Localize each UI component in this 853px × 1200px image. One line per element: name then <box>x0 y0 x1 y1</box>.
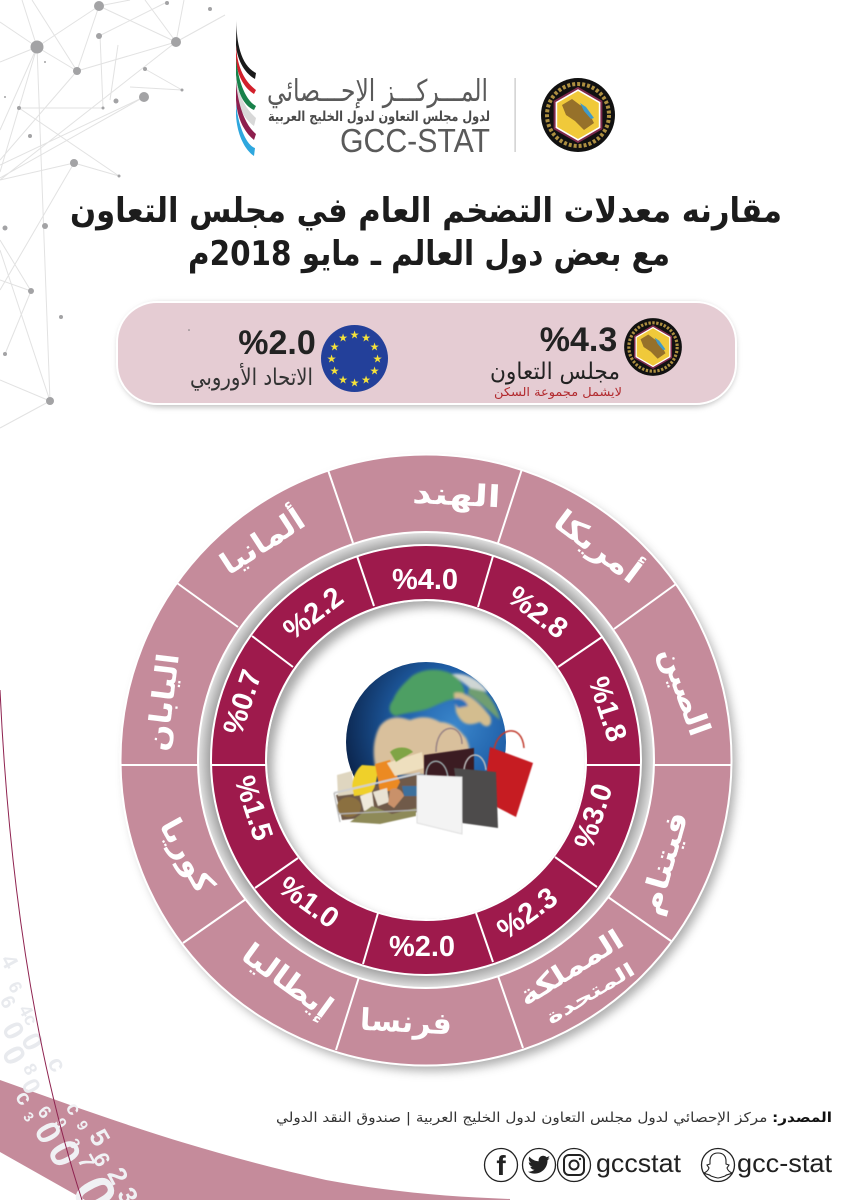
scattered number pattern: 0 <box>26 1116 69 1150</box>
scattered number pattern: 2 <box>101 1162 135 1189</box>
icon: EU flag: ★ <box>330 364 340 378</box>
basket with vegetables <box>334 748 424 824</box>
value: UK: %2.3 <box>491 881 564 946</box>
inner ring of values <box>238 572 614 948</box>
GCC note: لايشمل مجموعة السكن <box>494 385 622 400</box>
ring shadow <box>126 461 736 1071</box>
segment: Vietnam: فيتنام <box>633 808 696 919</box>
segment: Korea: كوريا <box>152 812 222 900</box>
ring gap <box>198 532 654 988</box>
scattered number pattern: 4c <box>15 1002 42 1029</box>
segment: India <box>392 476 501 596</box>
icon: EU flag: ★ <box>373 352 383 366</box>
value: France: %2.0 <box>389 931 455 963</box>
segment: Vietnam <box>569 780 696 919</box>
title line 2: مع بعض دول العالم ـ مايو 2018م <box>188 234 670 274</box>
EU value: %2.0 <box>238 324 316 362</box>
scattered number pattern: 0 <box>16 1074 46 1099</box>
EU label: الاتحاد الأوروبي <box>190 363 313 391</box>
scattered number pattern: c <box>10 1086 38 1110</box>
icon: facebook: f <box>496 1150 506 1181</box>
logo: GCC-STAT <box>236 18 490 159</box>
icon: GCC emblem <box>541 78 615 152</box>
value: Germany: %2.2 <box>278 581 350 646</box>
icon: snapchat <box>702 1148 734 1182</box>
value: Korea: %1.5 <box>228 772 278 845</box>
icon: EU flag: ★ <box>338 374 348 386</box>
grey bag <box>454 755 498 828</box>
value: China: %1.8 <box>582 673 632 746</box>
scattered number pattern: 0 <box>15 1027 50 1056</box>
segment: China: الصين <box>652 642 717 741</box>
scattered number pattern: 6 <box>88 1148 116 1171</box>
segment: Germany <box>212 499 350 646</box>
segment: Italy: إيطاليا <box>235 936 339 1026</box>
segment: USA <box>501 501 649 645</box>
segment: Korea <box>152 772 278 900</box>
thin maroon curve <box>0 690 82 1200</box>
bottom pink swoosh band <box>0 1080 510 1200</box>
icon: EU flag: ★ <box>330 340 340 354</box>
segment: Germany: ألمانيا <box>212 499 312 583</box>
icon: EU flag: ★ <box>350 328 360 342</box>
scattered number pattern: 3 <box>20 1109 38 1125</box>
globe <box>346 662 506 786</box>
segment: France: فرنسا <box>359 1003 453 1042</box>
scattered number pattern: 8 <box>19 1060 41 1078</box>
scattered number pattern: 5 <box>83 1124 116 1151</box>
outer ring of country segments <box>159 493 693 1027</box>
network background pattern <box>0 0 225 428</box>
center disc <box>264 598 593 927</box>
white bag <box>417 761 462 834</box>
maroon bag <box>424 728 474 790</box>
icon: EU flag: ★ <box>361 332 371 344</box>
segment: UK: المملكة <box>513 924 630 1013</box>
source label and text: المصدر: مركز الإحصائي لدول مجلس التعاون لدول الخليج العربية | صندوق النقد الدولي <box>276 1110 832 1126</box>
logo arabic subtitle: لدول مجلس التعاون لدول الخليج العربية <box>268 109 490 125</box>
icon: GCC emblem small <box>624 318 682 376</box>
title line 1: مقارنه معدلات التضخم العام في مجلس التعاون <box>70 191 782 231</box>
icon: EU flag: ★ <box>361 374 371 386</box>
segment: Japan: اليابان <box>140 651 187 753</box>
logo divider <box>514 78 516 152</box>
segment: Italy <box>235 870 345 1026</box>
scattered number pattern: 9 <box>50 1116 70 1132</box>
scattered number pattern: 3 <box>64 1136 83 1152</box>
social media row <box>484 1148 833 1182</box>
segment: France <box>359 931 455 1042</box>
scattered number pattern: 7 <box>73 1150 101 1173</box>
scattered number pattern: 6 <box>34 1102 55 1122</box>
GCC value: %4.3 <box>540 321 617 359</box>
handle: gccstat: gccstat <box>596 1148 682 1178</box>
logo arabic name: المـــركـــز الإحـــصائي <box>267 74 488 109</box>
value: India: %4.0 <box>392 564 458 596</box>
scattered number pattern <box>0 950 145 1200</box>
chart: radial inflation ring <box>120 454 736 1071</box>
segment: UK: المتحدة <box>542 959 639 1029</box>
icon: EU flag: ★ <box>338 332 348 344</box>
scattered number pattern: 6 <box>4 978 26 996</box>
segment: India: الهند <box>412 476 501 515</box>
panel: GCC vs EU headline <box>117 302 736 407</box>
icon: EU flag <box>321 325 388 392</box>
scattered number pattern: c <box>61 1099 86 1119</box>
icon: instagram <box>558 1148 590 1182</box>
scattered number pattern: c <box>42 1052 72 1077</box>
red bag <box>483 731 533 817</box>
center image: globe with shopping bags and basket <box>334 662 533 834</box>
scattered number pattern: 0 <box>39 1132 91 1175</box>
segment: USA: أمريكا <box>547 501 649 591</box>
logo ribbon <box>236 18 256 156</box>
icon: twitter <box>522 1148 556 1182</box>
value: Japan: %0.7 <box>218 666 268 739</box>
handle: gcc-stat: gcc-stat <box>737 1148 833 1178</box>
icon: EU flag: ★ <box>327 352 337 366</box>
value: USA: %2.8 <box>501 580 573 645</box>
icon: EU flag: ★ <box>350 376 360 390</box>
value: Vietnam: %3.0 <box>569 780 619 853</box>
segment: UK <box>491 881 639 1029</box>
icon: EU flag: ★ <box>370 340 380 354</box>
segment: China <box>582 642 717 746</box>
icon: facebook <box>484 1148 518 1182</box>
title <box>70 191 782 274</box>
value: Italy: %1.0 <box>272 870 345 935</box>
GCC label: مجلس التعاون <box>490 359 620 385</box>
scattered number pattern: 9 <box>72 1118 91 1134</box>
segment: Japan <box>140 651 268 753</box>
logo latin name: GCC-STAT <box>340 122 490 159</box>
icon: EU flag: ★ <box>370 364 380 378</box>
